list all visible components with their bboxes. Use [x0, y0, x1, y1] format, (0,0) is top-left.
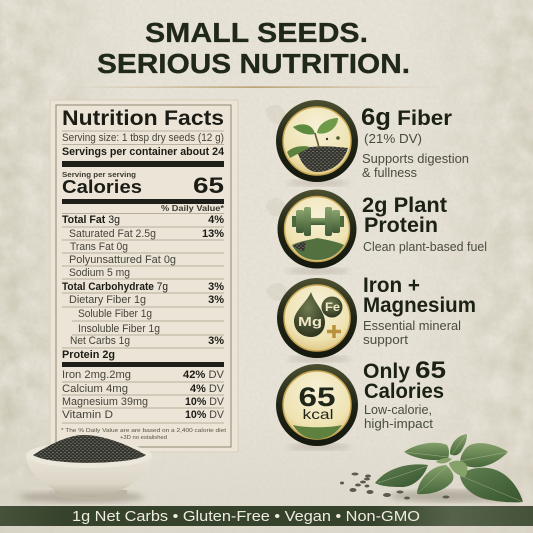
serving info: Servings per container about 24: [62, 146, 225, 158]
minerals description: [363, 319, 461, 347]
footnote: [61, 428, 227, 441]
feature: protein: [278, 190, 487, 274]
minerals rows: Vitamin D: [62, 409, 113, 421]
calories: [62, 170, 225, 213]
icon: sprout and seeds: [276, 100, 358, 186]
icon: 65 kcal: kcal: [302, 406, 334, 422]
minerals description: support: [363, 333, 409, 347]
fiber description: & fullness: [362, 166, 417, 180]
icon: mineral drops: Mg: [298, 314, 322, 329]
protein heading: [362, 194, 447, 237]
calories: Calories: [62, 177, 142, 197]
nutrient rows: Trans Fat 0g: [70, 241, 128, 253]
feature: fiber: [276, 100, 469, 186]
calories: 65: [193, 173, 224, 198]
nutrient rows: Total Fat 3g: [62, 214, 120, 226]
fiber heading: 6g Fiber: [361, 104, 452, 131]
serving info: Serving size: 1 tbsp dry seeds (12 g): [62, 132, 224, 144]
title: SERIOUS NUTRITION.: [97, 48, 410, 79]
nutrient rows: 4%: [208, 214, 224, 226]
protein description: Clean plant-based fuel: [363, 240, 487, 254]
calories description: high-impact: [364, 417, 434, 431]
fiber DV: (21% DV): [364, 131, 422, 146]
nutrient rows: Polyunsattured Fat 0g: [69, 254, 176, 266]
nutrient rows: Net Carbs 1g: [70, 335, 130, 347]
icon: 65 kcal: [276, 364, 358, 450]
calories heading: [363, 357, 446, 403]
minerals rows: Calcium 4mg: [62, 383, 128, 395]
feature: minerals: [277, 274, 476, 362]
minerals rows: 42% DV: [183, 369, 225, 381]
fiber description: Supports digestion: [362, 152, 469, 166]
minerals rows: 10% DV: [185, 396, 225, 408]
calories heading: 65: [415, 357, 446, 384]
minerals description: Essential mineral: [363, 319, 461, 333]
minerals rows: 10% DV: [185, 409, 225, 421]
icon: mineral drops: [277, 278, 357, 362]
nutrient rows: Insoluble Fiber 1g: [78, 323, 160, 335]
nutrient rows: 3%: [208, 335, 224, 347]
footnote: +3D no estalished: [120, 435, 167, 441]
nutrient rows: Protein 2g: [62, 349, 115, 361]
footer band: 1g Net Carbs • Gluten-Free • Vegan • Non-GMO: [72, 508, 420, 525]
minerals heading: [363, 274, 476, 317]
minerals rows: Magnesium 39mg: [62, 396, 148, 408]
nutrient rows: 3%: [208, 294, 224, 306]
minerals heading: Iron +: [363, 274, 420, 297]
icon: scattered chia seeds: [340, 472, 450, 500]
icon: bowl of chia seeds: [20, 435, 152, 503]
nutrition facts heading: Nutrition Facts: [62, 107, 224, 130]
nutrient rows: 13%: [202, 228, 224, 240]
icon: dumbbell: [278, 190, 356, 274]
protein heading: 2g Plant: [362, 194, 447, 217]
icon: mineral drops: Fe: [325, 302, 340, 314]
nutrient rows: Dietary Fiber 1g: [69, 294, 146, 306]
calories heading: Calories: [364, 380, 444, 403]
title: SMALL SEEDS.: [145, 17, 368, 48]
footer band: [0, 506, 533, 526]
nutrient rows: 3%: [208, 281, 224, 293]
nutrient rows: Total Carbohydrate 7g: [62, 281, 168, 293]
minerals rows: [62, 369, 225, 421]
calories: Serving per serving: [62, 170, 136, 179]
fiber description: [362, 152, 469, 180]
panel: nutrition facts: [50, 100, 238, 452]
title rule: [70, 86, 442, 88]
protein heading: Protein: [364, 214, 438, 237]
minerals rows: Iron 2mg.2mg: [62, 369, 131, 381]
title: [97, 17, 410, 79]
feature: calories: [276, 357, 446, 450]
icon: basil sprig: [375, 434, 523, 502]
footnote: * The % Daily Value are are based on a 2,400 calorie diet: [61, 428, 227, 434]
nutrient rows: Sodium 5 mg: [69, 267, 130, 279]
calories: % Daily Value*: [161, 203, 225, 213]
serving info: [62, 131, 225, 167]
nutrient rows: Saturated Fat 2.5g: [69, 228, 156, 240]
icon: 65 kcal: 65: [298, 382, 336, 412]
calories description: Low-calorie,: [364, 403, 432, 417]
nutrient rows: Soluble Fiber 1g: [78, 308, 152, 320]
nutrient rows: [62, 214, 224, 423]
calories heading: Only: [363, 360, 410, 383]
minerals heading: Magnesium: [363, 294, 476, 317]
calories description: [364, 403, 434, 431]
minerals rows: 4% DV: [190, 383, 225, 395]
